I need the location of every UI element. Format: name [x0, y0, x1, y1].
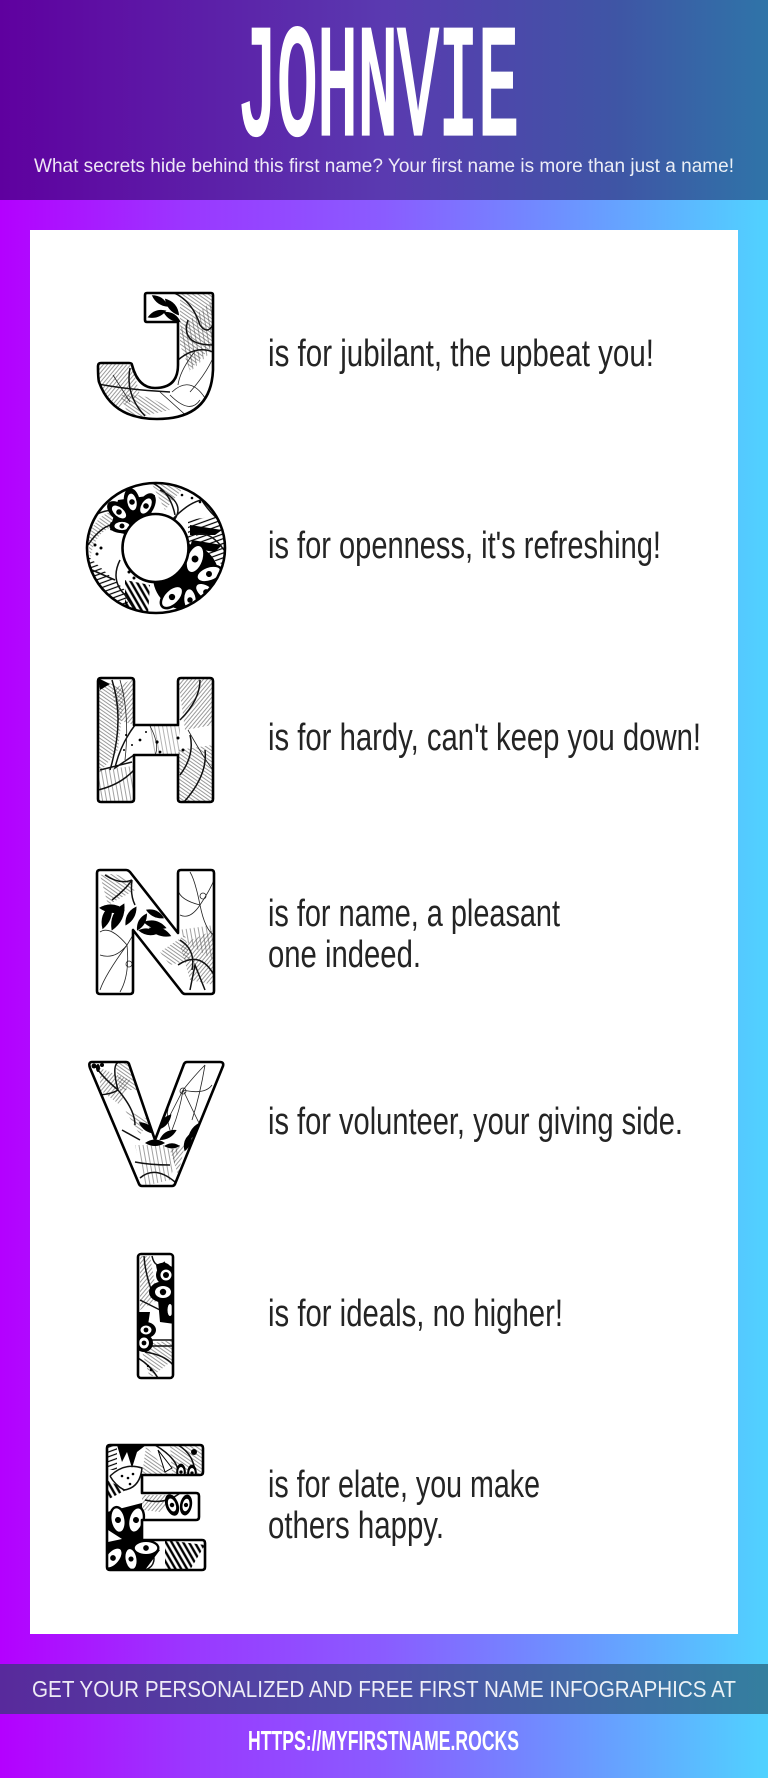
icon: letter H — [98, 678, 213, 802]
subtitle: What secrets hide behind this first name? Your first name is more than just a name! — [34, 155, 734, 177]
text: I row: is for ideals, no higher! — [268, 1293, 563, 1335]
icon: letter I — [135, 1254, 177, 1378]
text: N row: is for name, a pleasant — [268, 893, 560, 935]
icon: letter N — [97, 870, 214, 994]
text: O row: is for openness, it's refreshing! — [268, 525, 661, 567]
text: N row — [268, 893, 560, 976]
icon: letter E — [100, 1445, 205, 1572]
header band — [0, 0, 768, 200]
text: J row: is for jubilant, the upbeat you! — [268, 333, 654, 375]
icon: letter J — [98, 292, 213, 419]
text: E row: others happy. — [268, 1505, 444, 1547]
footer band — [0, 1664, 768, 1714]
footer url: HTTPS://MYFIRSTNAME.ROCKS — [248, 1725, 519, 1756]
title: JOHNVIE — [237, 4, 519, 181]
text: E row — [268, 1464, 540, 1547]
text: E row: is for elate, you make — [268, 1464, 540, 1506]
white content panel — [30, 230, 738, 1634]
icon: letter V — [89, 1062, 223, 1186]
icon: letter O — [87, 480, 225, 615]
text: N row: one indeed. — [268, 934, 421, 976]
